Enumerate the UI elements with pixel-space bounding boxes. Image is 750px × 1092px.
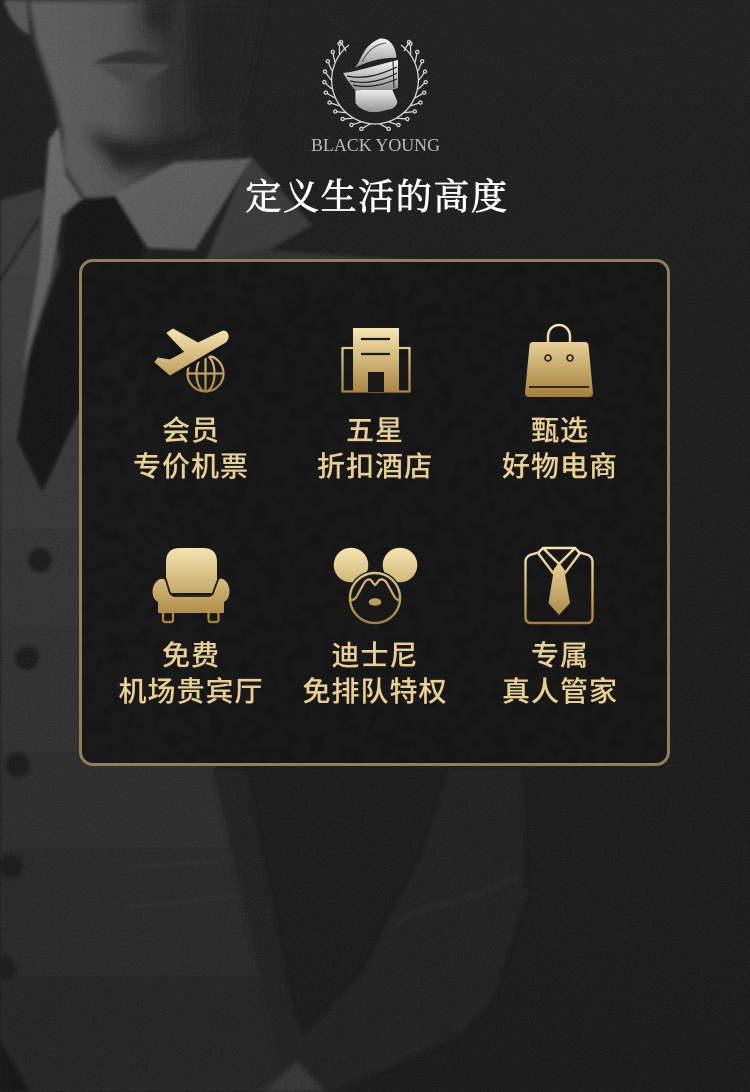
text: 迪士尼免排队特权: 迪士尼 bbox=[331, 640, 418, 671]
tie bbox=[18, 195, 145, 490]
text: 甄选好物电商: 好物电商 bbox=[502, 450, 618, 482]
icon: airplane and globe bbox=[150, 329, 228, 392]
icon: shopping bag bbox=[525, 325, 593, 397]
logo: Black Young knight helmet and wreath bbox=[311, 38, 440, 155]
icon: mickey mouse head bbox=[334, 548, 417, 626]
text: 专属真人管家: 真人管家 bbox=[502, 676, 618, 706]
shirt collar bbox=[22, 126, 85, 375]
icon: armchair bbox=[153, 548, 230, 622]
text: 免费机场贵宾厅: 免费 bbox=[162, 640, 220, 671]
text: 五星折扣酒店 bbox=[317, 415, 433, 482]
text: 专属真人管家: 专属 bbox=[531, 640, 589, 671]
text: 迪士尼免排队特权 bbox=[302, 640, 448, 706]
text: 免费机场贵宾厅 bbox=[118, 640, 264, 706]
face and neck bbox=[28, 0, 262, 200]
lips bbox=[93, 50, 172, 64]
panel: membership benefits bbox=[79, 259, 670, 766]
text: 会员专价机票: 专价机票 bbox=[133, 450, 249, 482]
text: 会员专价机票 bbox=[133, 415, 249, 482]
icon: hotel building bbox=[342, 328, 410, 392]
title: 定义生活的高度 bbox=[245, 177, 509, 217]
text: 迪士尼免排队特权: 免排队特权 bbox=[302, 676, 448, 706]
jacket front and sleeve bbox=[213, 768, 526, 1092]
text: 免费机场贵宾厅: 机场贵宾厅 bbox=[118, 676, 264, 706]
text: 五星折扣酒店: 五星 bbox=[346, 415, 404, 446]
text: 甄选好物电商: 甄选 bbox=[531, 415, 589, 446]
text: 甄选好物电商 bbox=[502, 415, 618, 482]
logo: Black Young knight helmet and wreath: BLACK YOUNG bbox=[311, 135, 440, 155]
text: 五星折扣酒店: 折扣酒店 bbox=[317, 450, 433, 482]
text: 会员专价机票: 会员 bbox=[162, 415, 220, 446]
icon: shirt and tie bbox=[526, 548, 592, 623]
text: 专属真人管家 bbox=[502, 640, 618, 706]
